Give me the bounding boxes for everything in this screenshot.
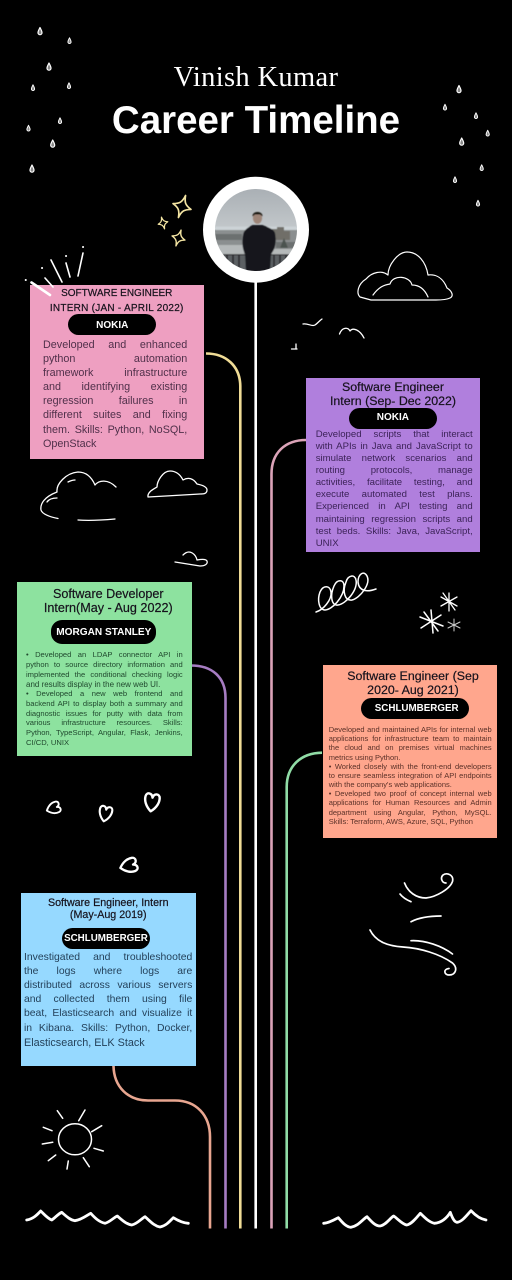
job description: the logs where logs are xyxy=(24,966,192,977)
icon: wave right xyxy=(324,1211,486,1227)
job title: (May-Aug 2019) xyxy=(70,909,147,921)
icon: cloud under pink card xyxy=(41,472,116,520)
company pill: SCHLUMBERGER xyxy=(64,933,148,944)
job description: in Kibana. Skills: Python, Docker, xyxy=(24,1023,192,1034)
job description: backend API to display both a summary and xyxy=(26,699,183,708)
job title: Intern(May - Aug 2022) xyxy=(44,601,173,615)
company pill xyxy=(361,698,469,719)
job description: to ensure seamless integration of API endpoints xyxy=(329,771,492,780)
job description: distributed across various servers xyxy=(24,980,192,991)
job description: Python, TypeScript, Angular, Flask, Jenkins, xyxy=(26,728,183,737)
job description: applications for Human Resources and Admin xyxy=(329,798,492,807)
job description: Skills: Terraform, AWS, Azure, SQL, Python xyxy=(329,817,473,826)
job description: simulate network scenarios and xyxy=(316,453,473,464)
job description: with the company's web applications. xyxy=(329,780,452,789)
card: Software Engineer Intern at Nokia (Sep-Dec 2022) xyxy=(306,378,480,552)
company pill xyxy=(68,314,156,335)
job description: regression failures in xyxy=(43,395,187,407)
job title: Software Engineer xyxy=(342,380,444,394)
job description: • Developed a new web frontend and xyxy=(26,689,183,698)
card: Software Engineer Intern at Schlumberger (2019) xyxy=(21,893,196,1066)
job description: execute automated test plans. xyxy=(316,489,473,500)
icon: large cloud top right xyxy=(358,252,452,300)
icon: asterisk stars xyxy=(420,593,460,633)
icon: loop squiggle xyxy=(316,573,376,612)
job description: and collected them using file xyxy=(24,994,192,1005)
job description xyxy=(328,725,492,826)
icon: hearts xyxy=(45,793,160,875)
job description: and identifying existing xyxy=(43,381,187,393)
icon: raindrops left xyxy=(27,28,71,172)
job description: metrics using Python. xyxy=(329,753,400,762)
name heading: Vinish Kumar xyxy=(174,62,338,93)
job description: • Developed two proof of concept internal web xyxy=(329,789,492,798)
job description: with APIs in Java and JavaScript to xyxy=(316,441,473,452)
icon: raindrops right xyxy=(443,86,489,206)
job description: routing protocols, manage xyxy=(316,465,473,476)
job description: Elasticsearch, ELK Stack xyxy=(24,1037,145,1049)
icon: sun xyxy=(42,1110,103,1169)
job title: Software Developer xyxy=(53,587,164,601)
job description: different suites and fixing xyxy=(43,409,187,421)
job description xyxy=(316,429,473,549)
job title: Software Engineer, Intern xyxy=(48,897,169,909)
company pill: NOKIA xyxy=(377,412,409,423)
job description: python automation xyxy=(43,353,187,365)
job description: Experienced in API testing and xyxy=(316,501,473,512)
salmon connector: Schlumberger 2019 xyxy=(114,1066,210,1228)
photo ring xyxy=(203,177,309,283)
job title: SOFTWARE ENGINEER xyxy=(61,288,172,299)
job description: department using Angular, Python, MySQL. xyxy=(329,808,492,816)
job description: UNIX xyxy=(316,538,339,549)
job title: INTERN (JAN - APRIL 2022) xyxy=(50,303,184,314)
job description xyxy=(43,339,187,450)
card: Software Engineer at Schlumberger (2020-2021) xyxy=(323,664,497,838)
company pill xyxy=(349,408,437,429)
job title: 2020- Aug 2021) xyxy=(367,683,459,697)
purple connector: Morgan Stanley xyxy=(191,666,226,1228)
job description: the cloud and on premises virtual machines xyxy=(329,743,492,752)
green connector: Schlumberger 2020 xyxy=(287,753,322,1228)
job description: • Worked closely with the front-end developers xyxy=(329,762,492,771)
job description: Developed scripts that interact xyxy=(316,429,473,440)
job title xyxy=(347,669,479,697)
icon: burst lines xyxy=(26,247,83,295)
icon: birds and small arcs xyxy=(292,319,364,349)
icon: wind swirls xyxy=(370,874,456,975)
company pill: SCHLUMBERGER xyxy=(375,703,459,714)
job title: Intern (Sep- Dec 2022) xyxy=(330,394,456,408)
job description: and results display in the new web UI. xyxy=(26,680,160,689)
company pill: NOKIA xyxy=(96,320,128,331)
job description: Investigated and troubleshooted xyxy=(24,952,192,963)
job description xyxy=(24,952,192,1049)
job description: Developed and maintained APIs for internal web xyxy=(329,725,492,734)
yellow connector: Nokia intern 2022 xyxy=(206,354,240,1228)
job description: them. Skills: Python, NoSQL, xyxy=(43,424,187,436)
portrait xyxy=(214,188,298,272)
profile photo xyxy=(203,176,309,283)
pink connector: Nokia Sep-Dec 2022 xyxy=(272,440,306,1228)
icon: small cloud right of first cloud xyxy=(148,471,207,497)
job description xyxy=(26,650,183,747)
job description: diagnostic issues for putty with data from xyxy=(26,709,183,718)
job title: Software Engineer (Sep xyxy=(347,669,479,683)
job description: framework infrastructure xyxy=(43,367,187,379)
job description: various infrastructure resources. Skills: xyxy=(26,718,183,727)
icon: yellow sparkles xyxy=(157,193,195,248)
card: Software Developer Intern at Morgan Stanley xyxy=(17,582,192,756)
job title xyxy=(48,897,169,921)
company pill xyxy=(51,620,156,644)
job description: beat, Elasticsearch and visualize it xyxy=(24,1008,192,1019)
title xyxy=(112,62,400,142)
job title xyxy=(44,587,173,615)
job description: CI/CD, UNIX xyxy=(26,738,69,747)
company pill xyxy=(62,928,150,949)
job description: python to source directory information and xyxy=(26,660,183,669)
job description: activities, facilitate testing, and xyxy=(316,477,473,488)
icon: tiny cloud xyxy=(175,552,207,566)
job description: maintaining regression scripts and xyxy=(316,514,473,525)
card: Software Engineer Intern at Nokia (Jan-Apr 2022) xyxy=(30,284,204,458)
job description: Developed and enhanced xyxy=(43,339,187,351)
company pill: MORGAN STANLEY xyxy=(56,627,151,638)
job description: applications for infrastructure team to maintain xyxy=(329,734,492,743)
job title xyxy=(330,380,456,408)
job description: implemented the conditional checking logic xyxy=(26,670,183,679)
job description: test beds. Skills: Java, JavaScript, xyxy=(316,526,473,537)
icon: wave left xyxy=(27,1211,188,1227)
job description: • Developed an LDAP connector API in xyxy=(26,650,183,659)
central white timeline line xyxy=(254,280,257,1228)
job description: OpenStack xyxy=(43,438,96,450)
career timeline heading: Career Timeline xyxy=(112,98,400,142)
job title xyxy=(50,288,184,314)
